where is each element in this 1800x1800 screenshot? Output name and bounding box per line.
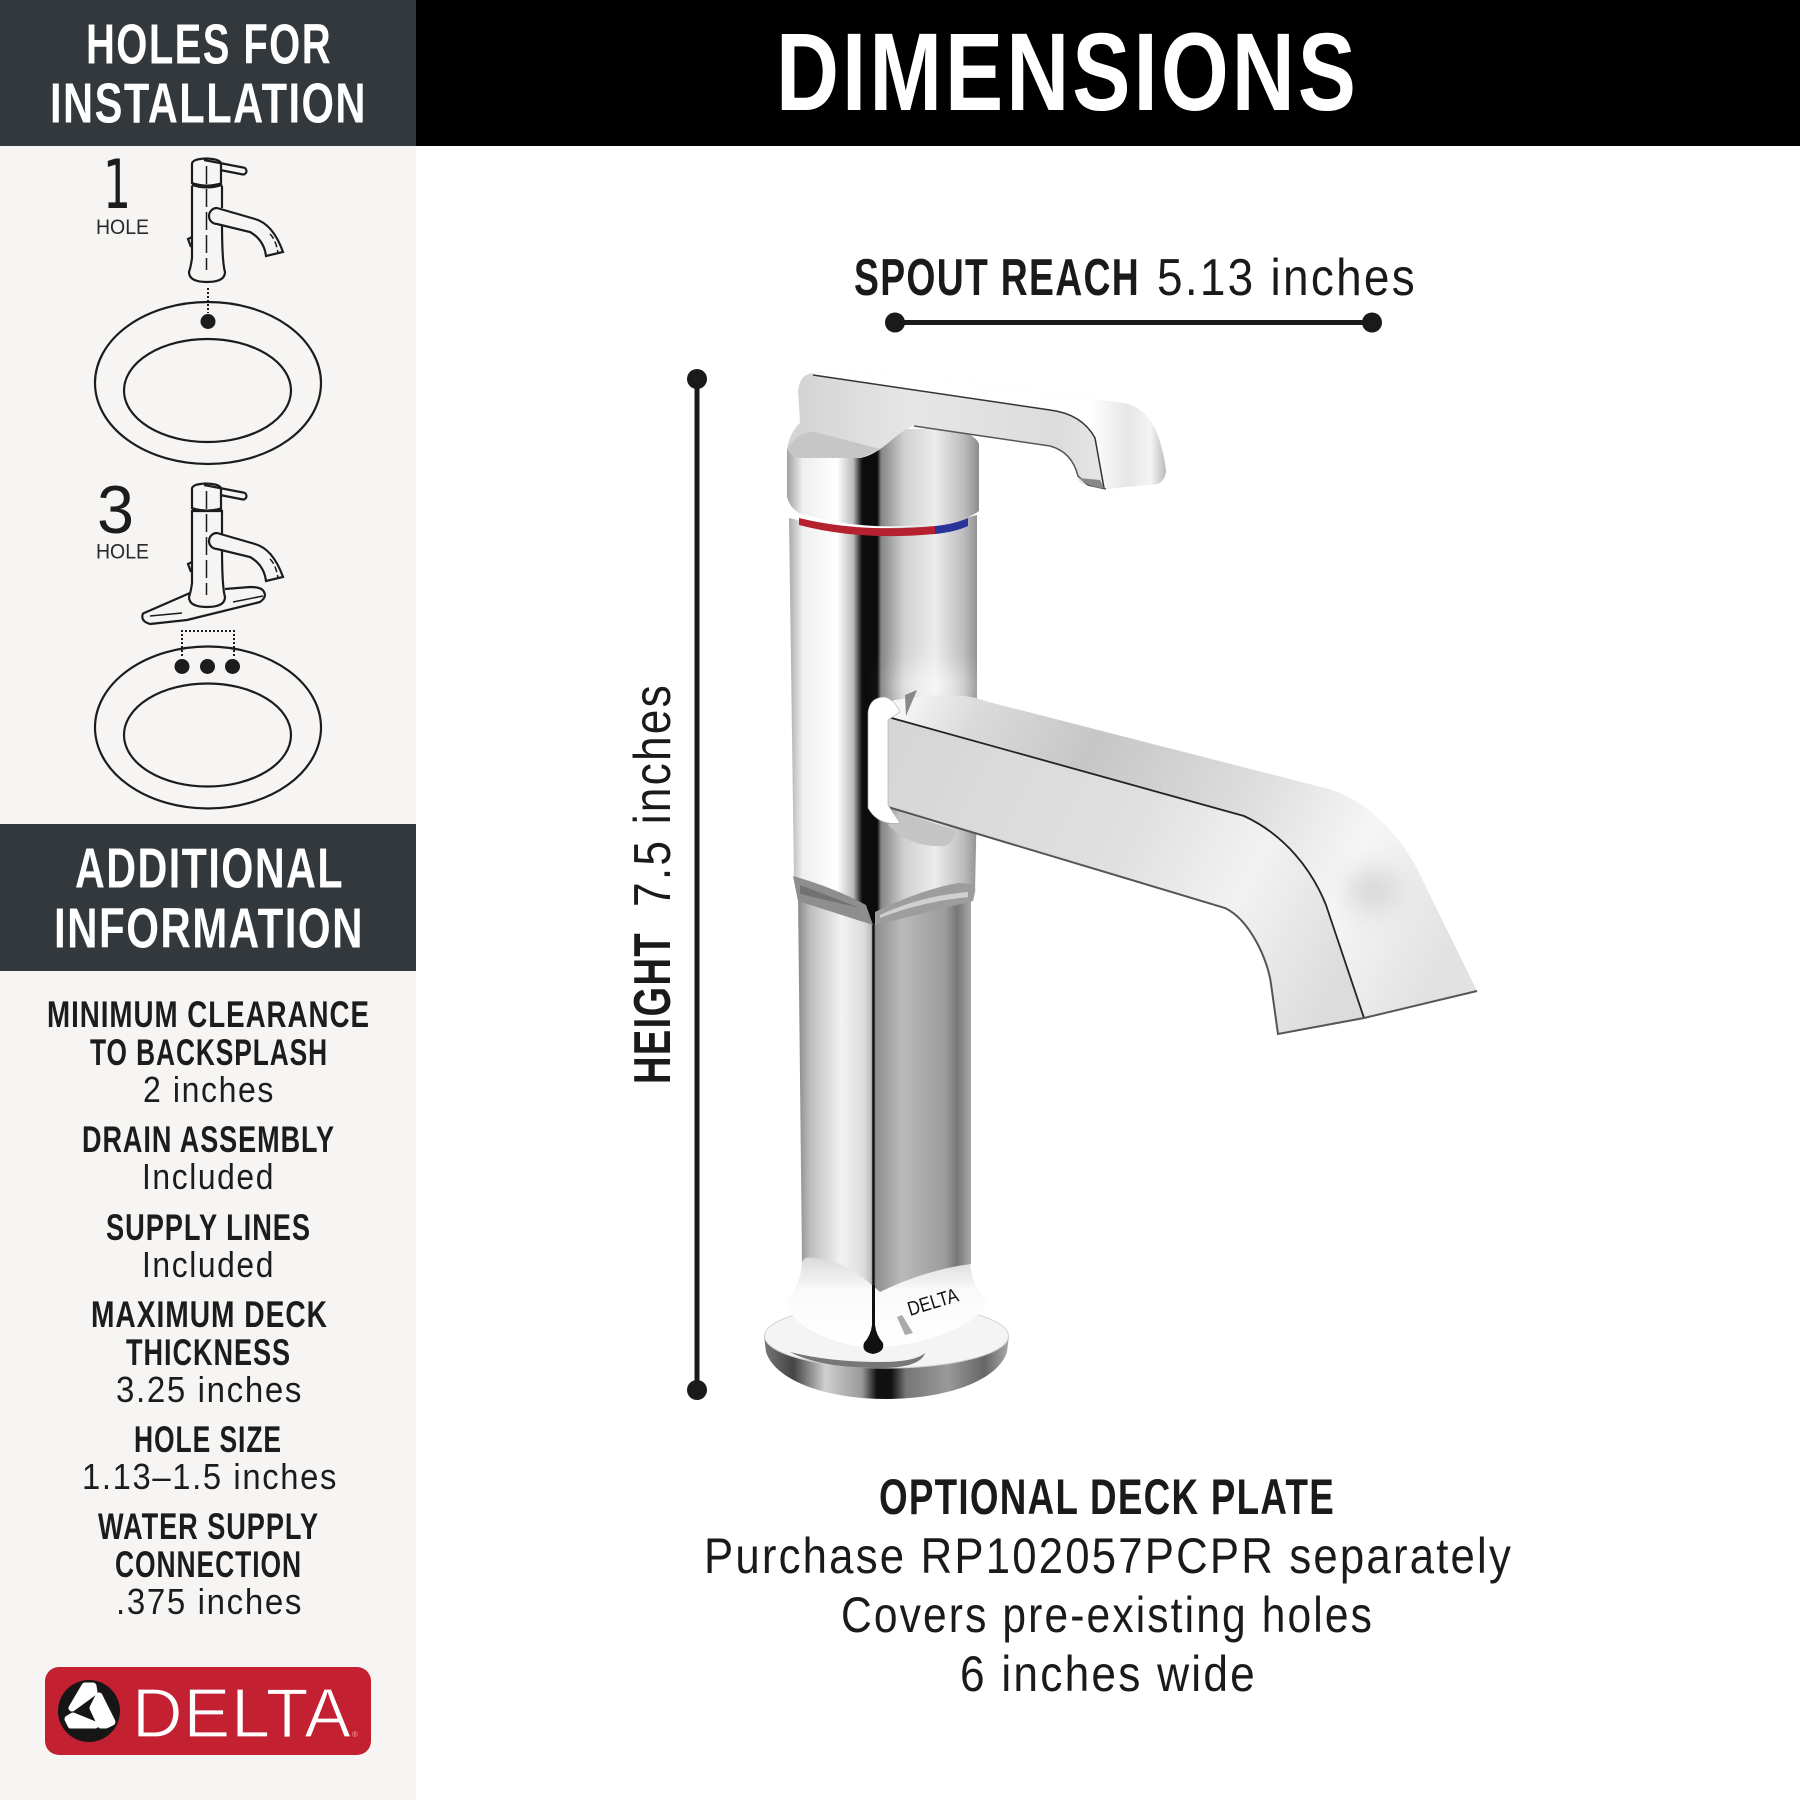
base slot (897, 1315, 913, 1335)
text block: specifications list: WATER SUPPLY (98, 1506, 319, 1547)
faucet hexagonal collar (793, 876, 975, 925)
dimension: height: 7.5 inches (624, 683, 682, 907)
faucet center reflection (863, 1285, 883, 1354)
text block: specifications list: Included (142, 1244, 275, 1285)
faucet upper body (789, 515, 977, 924)
heading: holes for installation: INSTALLATION (50, 72, 367, 136)
spout end highlight (1346, 870, 1398, 910)
dimension: spout reach: SPOUT REACH (854, 249, 1140, 307)
diagram: three hole installation: HOLE (96, 540, 149, 564)
heading: holes for installation (0, 0, 416, 146)
dimension: spout reach: 5.13 inches (1157, 249, 1417, 307)
text block: specifications list: 2 inches (143, 1069, 275, 1110)
faucet lower body (798, 895, 971, 1292)
diagram: three hole installation: 3 (97, 472, 134, 548)
text block: specifications list: THICKNESS (126, 1332, 291, 1373)
text block: specifications list: .375 inches (116, 1581, 303, 1622)
logo: Delta (45, 1667, 371, 1755)
text block: specifications list: TO BACKSPLASH (90, 1032, 328, 1073)
faucet top cap (787, 429, 979, 526)
spout front face (888, 717, 1364, 1034)
text block: specifications list (47, 994, 370, 1622)
spout mounting collar (868, 690, 955, 846)
title: dimensions: DIMENSIONS (776, 11, 1359, 134)
text block: specifications list: 3.25 inches (116, 1369, 303, 1410)
text block: specifications list: MAXIMUM DECK (91, 1294, 328, 1335)
text block: optional deck plate: 6 inches wide (960, 1646, 1257, 1702)
faucet base disk (764, 1304, 1009, 1399)
text block: optional deck plate: OPTIONAL DECK PLATE (879, 1469, 1335, 1525)
dimension: height: HEIGHT (624, 932, 682, 1084)
heading: additional information: ADDITIONAL (75, 836, 344, 900)
text block: specifications list: DRAIN ASSEMBLY (82, 1119, 335, 1160)
temperature ring (799, 518, 968, 536)
diagram: three hole installation (95, 472, 321, 808)
diagram: one hole installation (95, 146, 321, 464)
heading: holes for installation: HOLES FOR (86, 12, 332, 76)
dimension: spout reach (854, 249, 1417, 332)
logo: Delta: ® (352, 1730, 358, 1739)
text block: specifications list: SUPPLY LINES (106, 1207, 311, 1248)
text block: specifications list: Included (142, 1156, 275, 1197)
spout edge lines (888, 717, 1477, 1034)
logo: Delta: DELTA (132, 1674, 351, 1752)
handle lever (787, 371, 1166, 489)
product: chrome faucet (764, 371, 1477, 1399)
text block: specifications list: CONNECTION (115, 1544, 302, 1585)
neck reflection above spout (894, 670, 970, 702)
panel: left sidebar (0, 0, 416, 1800)
brand mark on base: DELTA (905, 1284, 962, 1321)
text block: specifications list: MINIMUM CLEARANCE (47, 994, 370, 1035)
faucet base flare (785, 1258, 988, 1348)
heading: additional information: INFORMATION (54, 896, 364, 960)
text block: specifications list: HOLE SIZE (134, 1419, 282, 1460)
spout top face (886, 695, 1477, 1018)
text block: optional deck plate: Purchase RP102057PCPR separately (704, 1528, 1513, 1584)
title: dimensions (416, 0, 1800, 146)
heading: additional information (0, 824, 416, 971)
dimension: height (624, 369, 707, 1400)
text block: specifications list: 1.13–1.5 inches (82, 1456, 338, 1497)
diagram: one hole installation: 1 (103, 146, 131, 225)
diagram: one hole installation: HOLE (96, 216, 149, 239)
text block: optional deck plate: Covers pre-existing holes (841, 1587, 1374, 1643)
text block: optional deck plate (704, 1469, 1513, 1702)
